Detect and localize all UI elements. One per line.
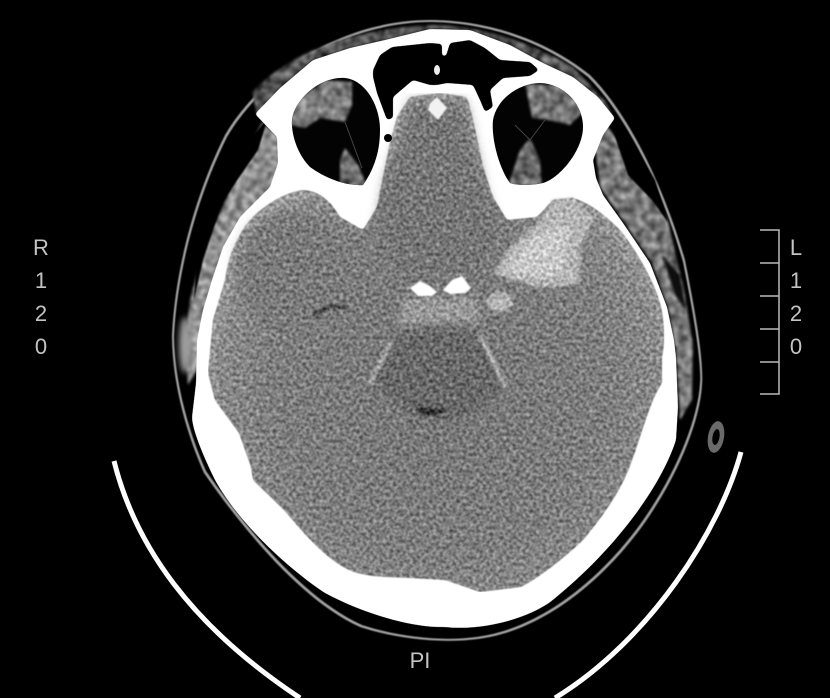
brainstem	[372, 328, 502, 420]
right orbit upper tissue	[525, 84, 585, 125]
suprasellar cistern brightness	[398, 296, 482, 325]
right optic line	[515, 120, 545, 140]
skull bone	[192, 29, 678, 628]
dorsum sellae left	[410, 281, 437, 296]
central skull base tissue	[375, 100, 500, 275]
label: left side: 0	[790, 334, 802, 359]
sylvian sulcus	[313, 307, 347, 316]
frontal scalp tissue	[252, 25, 613, 117]
brain tissue	[208, 93, 664, 592]
left optic line	[345, 122, 362, 168]
label: left side: L	[790, 235, 802, 260]
left orbit upper tissue	[290, 80, 352, 128]
scale bar	[760, 230, 779, 394]
label: right side: R	[33, 235, 49, 260]
sphenoid bright spot	[428, 97, 447, 120]
dorsum sellae right	[443, 276, 471, 294]
left frontal temporal lobe tone	[235, 210, 345, 330]
right optic nerve tissue	[508, 138, 542, 186]
label: PI: PI	[410, 648, 430, 673]
label: right side: 2	[35, 301, 47, 326]
fourth ventricle	[414, 407, 445, 416]
brain parenchyma	[208, 93, 664, 592]
right tentorial edge	[480, 335, 506, 387]
left scalp bright patch	[179, 317, 191, 373]
head CT scan	[172, 20, 702, 641]
left scalp fat stripe	[194, 118, 268, 300]
temporalis muscle right	[595, 125, 693, 420]
temporal hemorrhage	[493, 198, 593, 287]
label: left side: 1	[790, 268, 802, 293]
label: left side: 2	[790, 301, 802, 326]
hemorrhage core	[505, 225, 570, 278]
right orbit cavity	[492, 83, 583, 185]
label: left side	[790, 235, 802, 359]
sinus septum spot	[434, 65, 440, 75]
label: right side: 0	[35, 334, 47, 359]
left optic nerve tissue	[340, 148, 368, 188]
scalp outline	[172, 20, 702, 641]
left orbit	[292, 78, 380, 186]
external tube marker	[705, 420, 727, 454]
temporalis muscle left	[184, 122, 281, 385]
second hemorrhage focus	[487, 292, 513, 312]
frontal sinus air	[373, 40, 539, 120]
label: right side: 1	[35, 268, 47, 293]
right orbit	[492, 83, 583, 185]
right lower fat pocket	[662, 255, 686, 310]
left tentorial edge	[370, 340, 392, 384]
right scalp fat stripe	[610, 122, 668, 222]
small air bubble	[384, 134, 392, 142]
left orbit cavity	[292, 78, 380, 186]
label: right side	[33, 235, 49, 359]
head holder arc	[114, 452, 741, 698]
